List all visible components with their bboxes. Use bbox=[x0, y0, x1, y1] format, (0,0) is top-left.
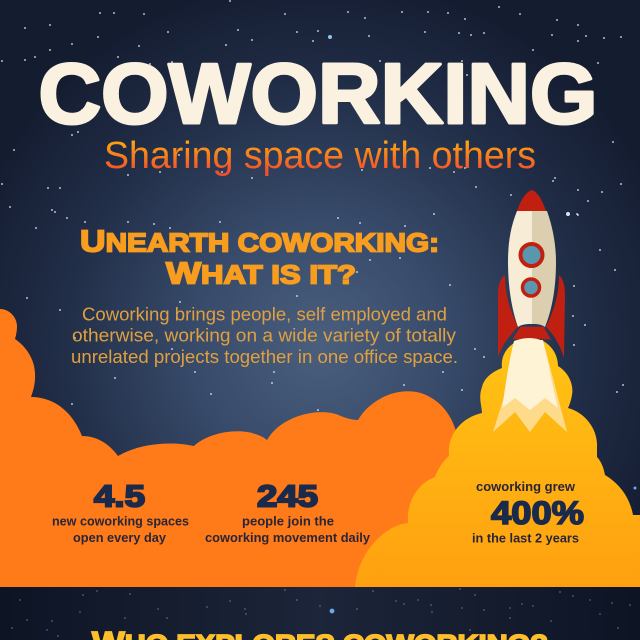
rocket nose bbox=[517, 190, 546, 211]
rocket window large bbox=[520, 244, 542, 266]
stat: 4.5 new spaces: open every day bbox=[73, 530, 167, 545]
paragraph: unrelated projects together in one office space. bbox=[71, 347, 458, 367]
stat: 4.5 new spaces bbox=[52, 478, 189, 545]
rocket nozzle bbox=[511, 326, 552, 340]
stat: 400% growth: in the last 2 years bbox=[472, 530, 579, 546]
flame bbox=[493, 338, 567, 432]
paragraph: otherwise, working on a wide variety of totally bbox=[72, 326, 456, 346]
yellow cloud bbox=[355, 337, 640, 587]
rocket fins bbox=[498, 275, 565, 358]
stat: 4.5 new spaces: new coworking spaces bbox=[52, 514, 189, 528]
rocket window small bbox=[522, 279, 540, 296]
paragraph bbox=[71, 304, 458, 367]
flame outer bbox=[493, 340, 567, 432]
rocket body right bbox=[532, 211, 556, 327]
heading: unearth coworking: UNEARTH COWORKING: bbox=[80, 224, 439, 258]
stat: 400% growth bbox=[472, 479, 584, 546]
bright stars bbox=[120, 35, 636, 613]
subtitle: Sharing space with others bbox=[104, 135, 536, 177]
flame inner bbox=[502, 338, 558, 410]
stat: 4.5 new spaces: 4.5 bbox=[94, 478, 145, 514]
heading: what is it: WHAT IS IT? bbox=[166, 256, 356, 290]
stat: 245 people: coworking movement daily bbox=[205, 530, 371, 545]
stat: 400% growth: coworking grew bbox=[476, 479, 576, 494]
rocket bbox=[498, 190, 565, 358]
paragraph: Coworking brings people, self employed and bbox=[82, 304, 447, 324]
stat: 245 people bbox=[205, 478, 371, 545]
stat: 245 people: people join the bbox=[242, 514, 334, 528]
background: lower band bbox=[0, 587, 640, 640]
rocket body left bbox=[508, 211, 532, 327]
title: COWORKING bbox=[38, 47, 598, 142]
stat: 245 people: 245 bbox=[257, 478, 318, 514]
orange cloud bbox=[0, 309, 456, 587]
stat: 400% growth: 400% bbox=[491, 495, 584, 531]
